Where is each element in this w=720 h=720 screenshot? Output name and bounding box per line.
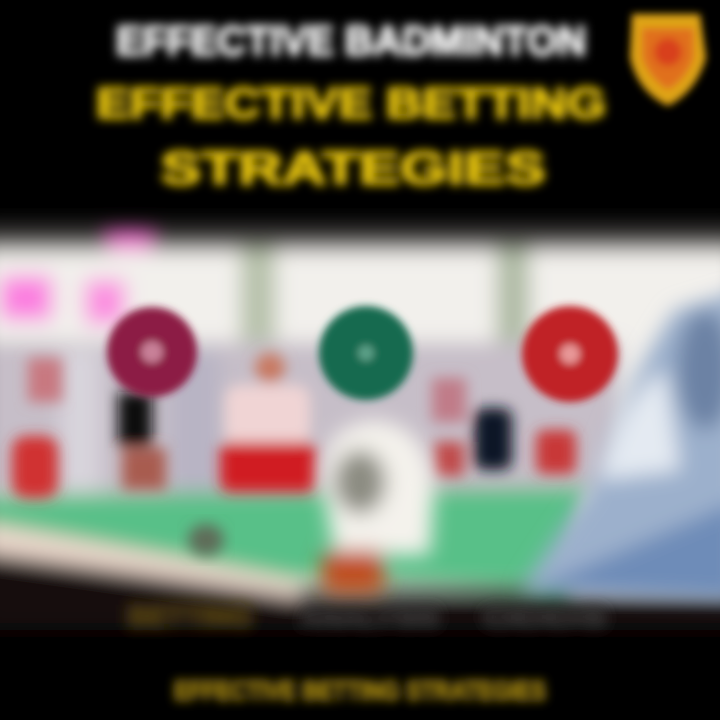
title: white heading line: EFFECTIVE BADMINTON [116, 17, 586, 64]
maroon player [118, 392, 166, 490]
caption: faint lower text: ANALYSIS [300, 602, 440, 632]
title: yellow heading line two: STRATEGIES [160, 142, 546, 194]
dark lower band [0, 552, 720, 630]
foreground player in blue [520, 290, 720, 600]
footer: yellow text: EFFECTIVE BETTING STRATEGIES [174, 675, 546, 706]
icon: shield logo [630, 14, 706, 106]
icon: red badge [522, 306, 618, 402]
caption: faint lower text: BETTING [128, 600, 252, 633]
icon: green badge [319, 306, 413, 400]
green court [0, 486, 590, 590]
caption: faint lower text [128, 600, 608, 633]
foreground player in white [322, 420, 434, 594]
pillars [240, 250, 530, 350]
pink banners [0, 232, 152, 324]
caption: faint lower text: ODDS [482, 602, 608, 632]
left red player [12, 358, 62, 498]
title: yellow heading line one: EFFECTIVE BETTING [96, 79, 606, 128]
spectator stand [0, 342, 620, 492]
icon: maroon badge [107, 307, 197, 397]
center red player [220, 353, 316, 492]
right players [432, 378, 576, 476]
white court edge [0, 522, 310, 598]
shuttlecock on court [188, 524, 224, 556]
photo: badminton match scene [0, 226, 720, 630]
